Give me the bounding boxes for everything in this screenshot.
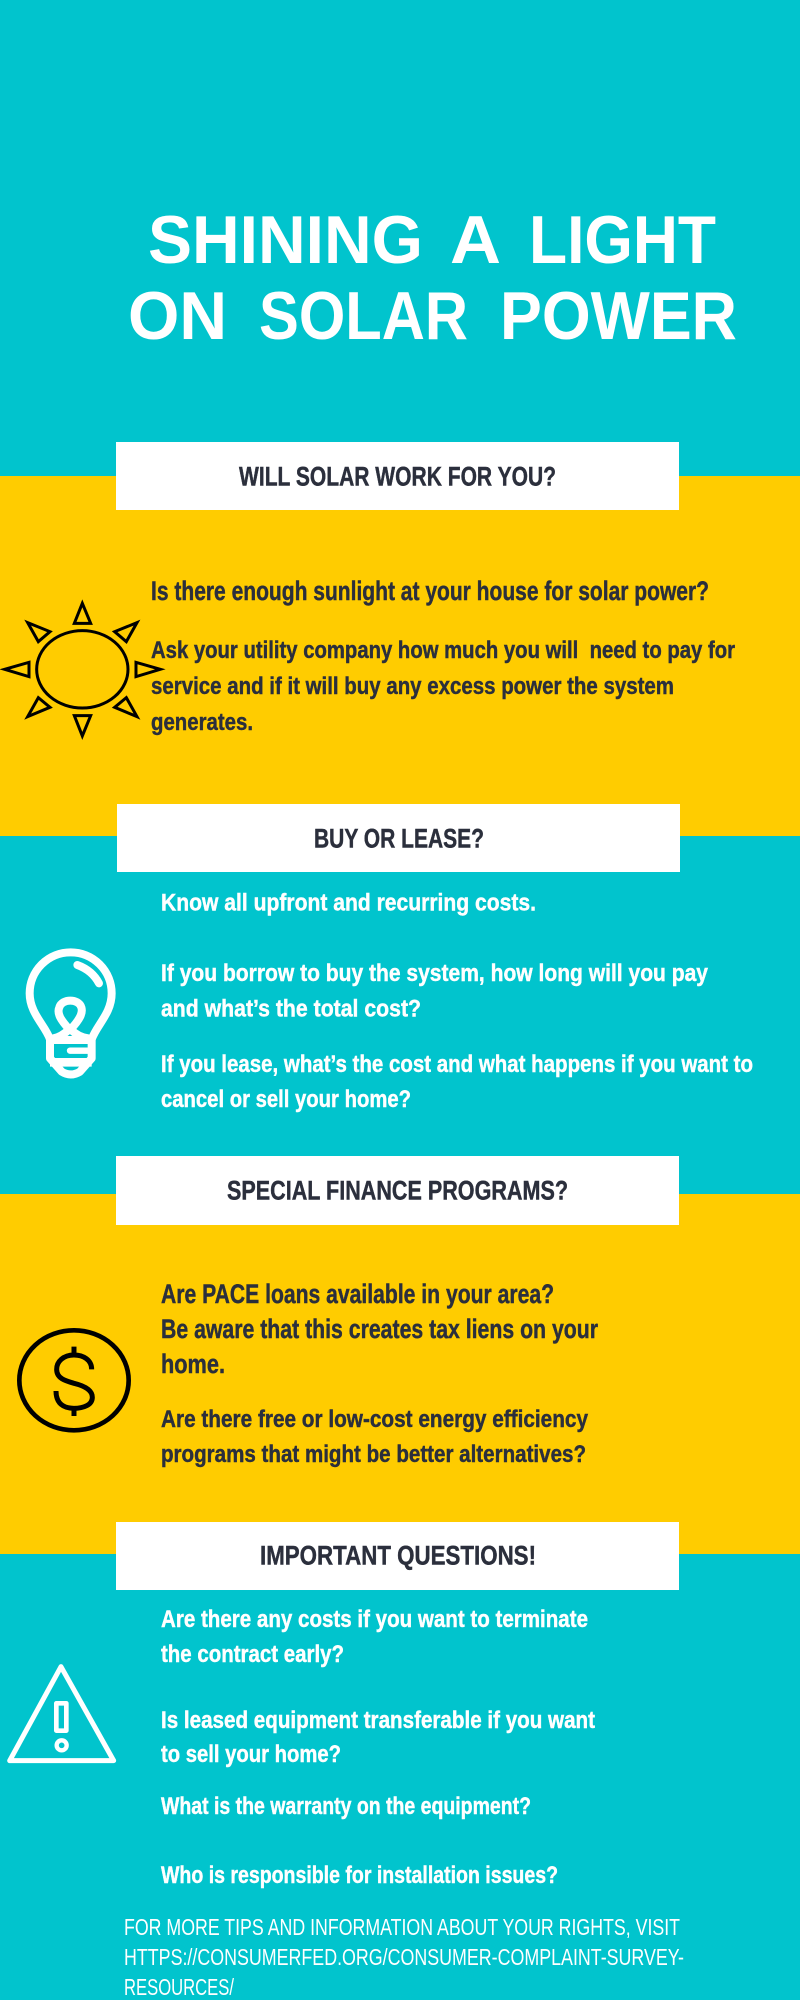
- panel: special finance programs: [0, 1156, 800, 1554]
- heading box: special finance programs: SPECIAL FINANCE PROGRAMS?: [227, 1176, 568, 1206]
- text block: buy or lease questions: cancel or sell your home?: [161, 1086, 411, 1113]
- text block: finance questions: [161, 1279, 598, 1468]
- text block: contract questions: the contract early?: [161, 1641, 344, 1668]
- text block: contract questions: Who is responsible for installation issues?: [161, 1862, 558, 1889]
- heading box: important questions: IMPORTANT QUESTIONS!: [260, 1540, 536, 1570]
- text block: finance questions: Are there free or low-cost energy efficiency: [161, 1406, 588, 1433]
- heading box: buy or lease: BUY OR LEASE?: [314, 824, 484, 854]
- panel: important questions: [10, 1522, 679, 1889]
- text block: buy or lease questions: and what’s the total cost?: [161, 996, 421, 1022]
- icon: warning triangle: [10, 1667, 114, 1761]
- text block: finance questions: Be aware that this creates tax liens on your: [161, 1314, 598, 1344]
- title: [128, 202, 737, 354]
- text block: contract questions: What is the warranty on the equipment?: [161, 1793, 531, 1820]
- footer text: [124, 1914, 684, 2000]
- text block: contract questions: to sell your home?: [161, 1741, 341, 1768]
- title: LIGHT: [529, 202, 716, 278]
- title: ON: [128, 278, 227, 354]
- heading box: will solar work for you: [116, 442, 679, 510]
- title: A: [450, 202, 501, 278]
- panel: buy or lease: [30, 804, 753, 1113]
- heading box: buy or lease: [117, 804, 680, 872]
- title: POWER: [500, 278, 737, 354]
- text block: buy or lease questions: [161, 890, 753, 1113]
- heading box: important questions: [116, 1522, 679, 1590]
- footer text: RESOURCES/: [124, 1974, 234, 2000]
- panel: will solar work for you: [0, 442, 800, 836]
- text block: sunlight question: generates.: [151, 709, 253, 736]
- title: SOLAR: [259, 278, 468, 354]
- icon: sun: [5, 603, 160, 736]
- text block: contract questions: Is leased equipment transferable if you want: [161, 1707, 595, 1734]
- text block: buy or lease questions: If you borrow to buy the system, how long will you pay: [161, 960, 708, 987]
- heading box: special finance programs: [116, 1156, 679, 1225]
- text block: contract questions: [161, 1606, 595, 1889]
- title: SHINING: [148, 202, 423, 278]
- text block: sunlight question: [151, 576, 735, 736]
- text block: contract questions: Are there any costs if you want to terminate: [161, 1606, 588, 1633]
- text block: finance questions: Are PACE loans available in your area?: [161, 1279, 554, 1309]
- icon: light bulb: [30, 952, 112, 1074]
- text block: finance questions: home.: [161, 1349, 225, 1379]
- heading box: will solar work for you: WILL SOLAR WORK FOR YOU?: [239, 462, 556, 492]
- icon: dollar coin: [19, 1330, 129, 1430]
- text block: finance questions: programs that might be better alternatives?: [161, 1441, 586, 1468]
- text block: buy or lease questions: Know all upfront and recurring costs.: [161, 890, 536, 916]
- text block: sunlight question: service and if it will buy any excess power the system: [151, 673, 674, 700]
